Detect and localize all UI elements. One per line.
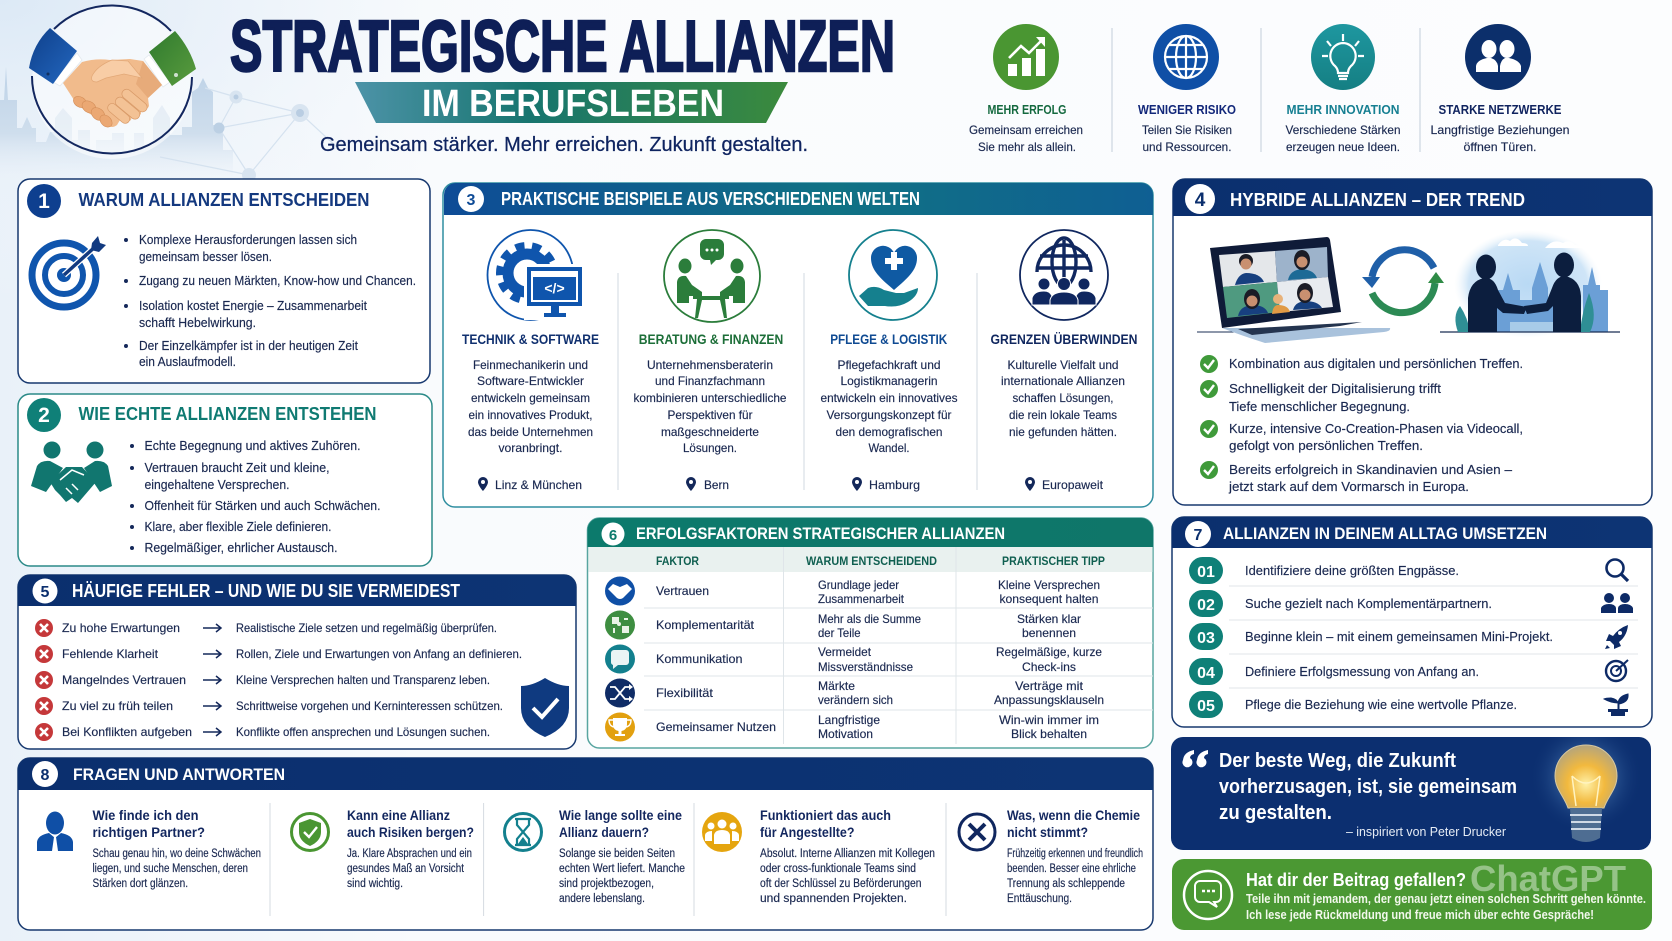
row: gemeinsamer nutzen: Langfristige [818, 713, 880, 727]
row: komplementaritaet: benennen [1022, 626, 1076, 640]
benefit: starke netzwerke: STARKE NETZWERKE [1438, 103, 1562, 117]
icon: teal handshake people [31, 442, 112, 503]
heading 1: WARUM ALLIANZEN ENTSCHEIDEN [78, 190, 370, 210]
faq: dauer: andere lebenslang. [559, 893, 645, 905]
list: reasons: Der Einzelkämpfer ist in der heutigen Zeit [139, 338, 358, 353]
call to action text [1246, 870, 1646, 922]
row: kommunikation: Missverständnisse [818, 660, 913, 674]
row: flexibilitaet: verändern sich [818, 693, 893, 707]
example: grenzen ueberwinden: Kulturelle Vielfalt und [1008, 358, 1118, 372]
illustration: laptop video call [1197, 237, 1390, 343]
list: foundations [130, 438, 380, 555]
list: mistakes and fixes: Fehlende Klarheit [62, 647, 159, 661]
badge 1 [27, 184, 61, 218]
icon: globe and people [1020, 230, 1108, 320]
faq: risiken: Kann eine Allianz [347, 808, 450, 823]
row: vertrauen [605, 576, 1100, 606]
header bar 4: HYBRIDE ALLIANZEN – DER TREND [1230, 190, 1525, 210]
arrows: mistake to fix [203, 624, 221, 736]
list: reasons: schafft Hebelwirkung. [139, 315, 256, 330]
list: hybrid points [1200, 355, 1523, 494]
list: reasons [124, 232, 416, 369]
icon: speech bubbles [1184, 871, 1232, 919]
header bar 3: PRAKTISCHE BEISPIELE AUS VERSCHIEDENEN WELTEN [501, 189, 920, 209]
faq: angestellte: Funktioniert das auch [760, 808, 891, 823]
example: grenzen ueberwinden: GRENZEN ÜBERWINDEN [990, 332, 1138, 347]
example: grenzen ueberwinden: internationale Allianzen [1001, 374, 1125, 388]
icon: shield with check [521, 678, 569, 737]
list: foundations: Offenheit für Stärken und auch Schwächen. [144, 498, 380, 513]
row: flexibilitaet: Märkte [818, 679, 855, 693]
row: vertrauen: Grundlage jeder [818, 578, 899, 592]
panel 1: warum allianzen entscheiden [18, 179, 430, 383]
header bar 8 [18, 758, 1153, 790]
list: mistakes and fixes: Realistische Ziele setzen und regelmäßig überprüfen. [236, 621, 497, 635]
error icons [35, 619, 53, 741]
benefit: starke netzwerke: öffnen Türen. [1464, 140, 1536, 154]
example: grenzen ueberwinden [990, 230, 1138, 492]
benefit: mehr innovation: MEHR INNOVATION [1286, 103, 1400, 117]
example: technik und software: TECHNIK & SOFTWARE [462, 332, 599, 347]
list: foundations: Echte Begegnung und aktives Zuhören. [144, 438, 360, 453]
example: grenzen ueberwinden: schaffen Lösungen, [1012, 391, 1114, 405]
faq: angestellte: für Angestellte? [760, 825, 854, 840]
icon: gear and monitor: </> [544, 280, 565, 296]
row: kommunikation: Check-ins [1022, 660, 1076, 674]
example: pflege und logistik: Versorgungskonzept für [826, 408, 952, 422]
table header: WARUM ENTSCHEIDEND [806, 554, 937, 568]
step 01: Identifiziere deine größten Engpässe. [1245, 563, 1459, 578]
table header: FAKTOR [656, 554, 699, 568]
icon: light bulb [1544, 737, 1628, 842]
faq: angestellte: und spannenden Projekten. [760, 893, 907, 905]
title: STRATEGISCHE ALLIANZEN [230, 7, 895, 87]
list: mistakes and fixes: Schrittweise vorgehen und Kerninteressen schützen. [236, 699, 503, 713]
example: pflege und logistik: Logistikmanagerin [840, 374, 938, 388]
icon: target [32, 236, 106, 307]
row: gemeinsamer nutzen: Motivation [818, 727, 873, 741]
list: hybrid points: Tiefe menschlicher Begegnung. [1229, 399, 1410, 414]
example: grenzen ueberwinden: nie gefunden hätten. [1009, 425, 1117, 439]
list: mistakes and fixes: Konflikte offen ansprechen und Lösungen suchen. [236, 725, 490, 739]
list: foundations: Vertrauen braucht Zeit und kleine, [144, 460, 330, 475]
faq: partner finden: liegen, und suche Menschen, deren [92, 863, 248, 875]
faq: angestellte: oft der Schlüssel zu Beförderungen [760, 878, 922, 890]
icon: gear and monitor [488, 230, 586, 320]
benefit: mehr innovation [1286, 24, 1400, 154]
benefit: mehr erfolg: Sie mehr als allein. [978, 140, 1076, 154]
example: beratung und finanzen: Lösungen. [683, 441, 737, 455]
row: vertrauen: konsequent halten [1000, 592, 1098, 606]
row: komplementaritaet [605, 610, 1081, 640]
header bar 5: HÄUFIGE FEHLER – UND WIE DU SIE VERMEIDEST [72, 581, 460, 601]
header bar 8: 8 [41, 767, 50, 784]
example: technik und software: entwickeln gemeinsam [471, 391, 590, 405]
list: mistakes and fixes: Bei Konflikten aufgeben [62, 725, 192, 739]
badge 2: 2 [38, 404, 50, 427]
faq: angestellte [702, 808, 935, 905]
example: pflege und logistik: den demografischen [836, 425, 942, 439]
step 03: 03 [1197, 630, 1215, 647]
step 03: Beginne klein – mit einem gemeinsamen Mini-Projekt. [1245, 629, 1553, 644]
row: flexibilitaet [605, 678, 1104, 708]
step 05 [1189, 691, 1628, 718]
step 04 [1189, 658, 1628, 685]
benefit: weniger risiko: und Ressourcen. [1142, 140, 1232, 154]
panel 3: praktische beispiele [443, 183, 1153, 507]
quote text [1219, 750, 1517, 839]
header bar 6 [588, 518, 1153, 547]
row: komplementaritaet: der Teile [818, 626, 861, 640]
example: technik und software: das beide Unternehmen [468, 425, 593, 439]
panel 7: allianzen im alltag [1172, 517, 1652, 727]
list: reasons: Zugang zu neuen Märkten, Know-how und Chancen. [139, 273, 416, 288]
example: grenzen ueberwinden: Europaweit [1042, 478, 1104, 492]
icon: cycle arrows [1362, 250, 1444, 313]
list: hybrid points: Kombination aus digitalen und persönlichen Treffen. [1229, 356, 1523, 371]
faq: partner finden [37, 808, 261, 890]
row: gemeinsamer nutzen [605, 712, 1099, 742]
list: foundations: eingehaltene Versprechen. [144, 477, 290, 492]
example: beratung und finanzen: Unternehmensberaterin [647, 358, 773, 372]
icon: quote marks [1182, 750, 1208, 767]
faq: chemie: Was, wenn die Chemie [1007, 808, 1140, 823]
faq: dauer: echten Wert liefert. Manche [559, 863, 685, 875]
faq: chemie [959, 808, 1143, 905]
faq: chemie: Enttäuschung. [1007, 893, 1072, 905]
faq: chemie: nicht stimmt? [1007, 825, 1088, 840]
quote text: vorherzusagen, ist, sie gemeinsam [1219, 776, 1517, 798]
row: komplementaritaet: Mehr als die Summe [818, 612, 921, 626]
row: gemeinsamer nutzen: Gemeinsamer Nutzen [656, 720, 776, 734]
illustration: people shaking hands with skyline [1440, 230, 1620, 338]
row: flexibilitaet: Flexibilität [656, 686, 714, 700]
list: mistakes and fixes: Kleine Versprechen halten und Transparenz leben. [236, 673, 490, 687]
panel 2: wie echte allianzen entstehen [18, 394, 432, 566]
benefit: mehr innovation: erzeugen neue Ideen. [1286, 140, 1400, 154]
example: beratung und finanzen: BERATUNG & FINANZEN [639, 332, 783, 347]
benefit: mehr erfolg [969, 24, 1083, 154]
header bar 3 [444, 183, 1153, 215]
example: technik und software: Linz & München [495, 478, 582, 492]
list: mistakes and fixes: Mangelndes Vertrauen [62, 673, 186, 687]
faq: angestellte: oder cross-funktionale Teams sind [760, 863, 916, 875]
quote text: – inspiriert von Peter Drucker [1346, 825, 1506, 839]
faq: risiken: gesundes Maß an Vorsicht [347, 863, 465, 875]
step 02 [1189, 590, 1633, 617]
faq: dauer: sind projektbezogen, [559, 878, 654, 890]
faq: partner finden: richtigen Partner? [92, 825, 205, 840]
badge 1: 1 [38, 190, 50, 213]
header bar 5 [18, 575, 576, 606]
header bar 4: 4 [1195, 190, 1206, 211]
faq: partner finden: Wie finde ich den [92, 808, 198, 823]
benefit: starke netzwerke [1430, 24, 1570, 154]
call to action panel [1172, 858, 1652, 930]
step 04: Definiere Erfolgsmessung von Anfang an. [1245, 664, 1479, 679]
faq: risiken [292, 808, 474, 890]
header bar 6: ERFOLGSFAKTOREN STRATEGISCHER ALLIANZEN [636, 524, 1005, 543]
benefit: mehr innovation: Verschiedene Stärken [1286, 123, 1400, 137]
row: komplementaritaet: Stärken klar [1017, 612, 1081, 626]
example: pflege und logistik [820, 230, 958, 492]
faq: dauer [504, 808, 685, 905]
row: flexibilitaet: Anpassungsklauseln [994, 693, 1104, 707]
row: gemeinsamer nutzen: Blick behalten [1011, 727, 1087, 741]
step 03 [1189, 623, 1628, 650]
header bar 7: 7 [1194, 527, 1203, 544]
example: technik und software: ein innovatives Produkt, [468, 408, 592, 422]
step 02: 02 [1197, 597, 1215, 614]
icon: meeting at table [664, 230, 760, 322]
row: gemeinsamer nutzen: Win-win immer im [999, 713, 1099, 727]
watermark: ChatGPT [1470, 858, 1626, 899]
panel 6: erfolgsfaktoren table [588, 518, 1153, 748]
example: beratung und finanzen: kombinieren unterschiedliche [634, 391, 787, 405]
header bar 8: FRAGEN UND ANTWORTEN [73, 765, 285, 784]
benefit: weniger risiko [1138, 24, 1236, 154]
faq: dauer: Solange sie beiden Seiten [559, 848, 675, 860]
faq: chemie: beenden. Besser eine ehrliche [1007, 863, 1136, 875]
call to action text: Ich lese jede Rückmeldung und freue mich über echte Gespräche! [1246, 908, 1594, 922]
faq: chemie: Trennung als schleppende [1007, 878, 1125, 890]
faq: angestellte: Absolut. Interne Allianzen mit Kollegen [760, 848, 935, 860]
step 05: 05 [1197, 698, 1215, 715]
row: flexibilitaet: Verträge mit [1015, 679, 1084, 693]
row: kommunikation [605, 644, 1102, 674]
list: reasons: Isolation kostet Energie – Zusammenarbeit [139, 298, 367, 313]
row: vertrauen: Vertrauen [656, 584, 709, 598]
list: hybrid points: Schnelligkeit der Digitalisierung trifft [1229, 381, 1441, 396]
call to action text: Hat dir der Beitrag gefallen? [1246, 870, 1466, 890]
table header: PRAKTISCHER TIPP [1002, 554, 1105, 568]
panel 4: hybride allianzen [1173, 179, 1652, 505]
header bar 7 [1172, 517, 1652, 548]
list: hybrid points: Kurze, intensive Co-Creation-Phasen via Videocall, [1229, 421, 1523, 436]
faq: risiken: sind wichtig. [347, 878, 403, 890]
subtitle ribbon: IM BERUFSLEBEN [422, 83, 724, 125]
faq: partner finden: Schau genau hin, wo deine Schwächen [92, 848, 261, 860]
list: foundations: Regelmäßiger, ehrlicher Austausch. [144, 540, 338, 555]
step 05: Pflege die Beziehung wie eine wertvolle Pflanze. [1245, 697, 1517, 712]
benefit: weniger risiko: WENIGER RISIKO [1138, 103, 1236, 117]
row: kommunikation: Vermeidet [818, 645, 872, 659]
icon: heart on hand [849, 230, 937, 320]
example: technik und software: Software-Entwickler [477, 374, 584, 388]
row: kommunikation: Regelmäßige, kurze [996, 645, 1102, 659]
example: pflege und logistik: Wandel. [868, 441, 910, 455]
example: grenzen ueberwinden: die rein lokale Teams [1009, 408, 1117, 422]
example: technik und software [462, 230, 599, 492]
faq: dauer: Wie lange sollte eine [559, 808, 682, 823]
example: technik und software: voranbringt. [498, 441, 562, 455]
faq: partner finden: Stärken dort glänzen. [92, 878, 188, 890]
benefit: mehr erfolg: MEHR ERFOLG [988, 103, 1066, 117]
header bar 7: ALLIANZEN IN DEINEM ALLTAG UMSETZEN [1223, 524, 1547, 543]
benefit: mehr erfolg: Gemeinsam erreichen [969, 123, 1083, 137]
example: pflege und logistik: entwickeln ein innovatives [820, 391, 958, 405]
table header [588, 547, 1152, 572]
example: pflege und logistik: PFLEGE & LOGISTIK [830, 332, 947, 347]
panel 5: haeufige fehler [18, 575, 576, 749]
example: pflege und logistik: Pflegefachkraft und [838, 358, 940, 372]
step 01 [1189, 557, 1628, 584]
faq: chemie: Frühzeitig erkennen und freundlich [1007, 848, 1143, 860]
list: reasons: ein Auslaufmodell. [139, 354, 236, 369]
example: beratung und finanzen: und Finanzfachmann [655, 374, 765, 388]
list: mistakes and fixes [62, 621, 522, 739]
list: hybrid points: gefolgt von persönlichen Treffen. [1229, 438, 1423, 453]
example: beratung und finanzen: Perspektiven für [668, 408, 752, 422]
tagline: Gemeinsam stärker. Mehr erreichen. Zukunft gestalten. [320, 133, 808, 156]
quote text: zu gestalten. [1219, 802, 1332, 824]
step 04: 04 [1197, 665, 1215, 682]
heading 2: WIE ECHTE ALLIANZEN ENTSTEHEN [78, 404, 376, 424]
row: vertrauen: Zusammenarbeit [818, 592, 905, 606]
header illustration: handshake in circle [29, 5, 196, 159]
benefit: starke netzwerke: Langfristige Beziehungen [1430, 123, 1570, 137]
list: reasons: Komplexe Herausforderungen lassen sich [139, 232, 357, 247]
badge 2 [27, 398, 61, 432]
example: beratung und finanzen: maßgeschneiderte [661, 425, 759, 439]
example: pflege und logistik: Hamburg [869, 478, 920, 492]
step 02: Suche gezielt nach Komplementärpartnern. [1245, 596, 1492, 611]
step 01: 01 [1197, 564, 1215, 581]
example: technik und software: Feinmechanikerin und [473, 358, 588, 372]
list: mistakes and fixes: Zu viel zu früh teilen [62, 699, 173, 713]
header bar 3: 3 [467, 192, 476, 209]
benefit: weniger risiko: Teilen Sie Risiken [1142, 123, 1232, 137]
header bar 6: 6 [609, 527, 617, 544]
list: hybrid points: jetzt stark auf dem Vormarsch in Europa. [1228, 479, 1469, 494]
list: foundations: Klare, aber flexible Ziele definieren. [144, 519, 332, 534]
panel 8: fragen und antworten [18, 758, 1153, 930]
example: beratung und finanzen: Bern [704, 478, 729, 492]
header bar 5: 5 [41, 584, 50, 601]
list: mistakes and fixes: Zu hohe Erwartungen [62, 621, 180, 635]
faq: dauer: Allianz dauern? [559, 825, 649, 840]
faq: risiken: auch Risiken bergen? [347, 825, 474, 840]
list: mistakes and fixes: Rollen, Ziele und Erwartungen von Anfang an definieren. [236, 647, 522, 661]
quote panel [1171, 737, 1651, 850]
header bar 4 [1173, 179, 1652, 216]
list: hybrid points: Bereits erfolgreich in Skandinavien und Asien – [1229, 462, 1513, 477]
row: komplementaritaet: Komplementarität [656, 618, 755, 632]
row: kommunikation: Kommunikation [656, 652, 742, 666]
row: vertrauen: Kleine Versprechen [998, 578, 1100, 592]
faq: risiken: Ja. Klare Absprachen und ein [347, 848, 472, 860]
example: beratung und finanzen [634, 230, 787, 492]
list: reasons: gemeinsam besser lösen. [139, 249, 272, 264]
quote text: Der beste Weg, die Zukunft [1219, 750, 1456, 772]
